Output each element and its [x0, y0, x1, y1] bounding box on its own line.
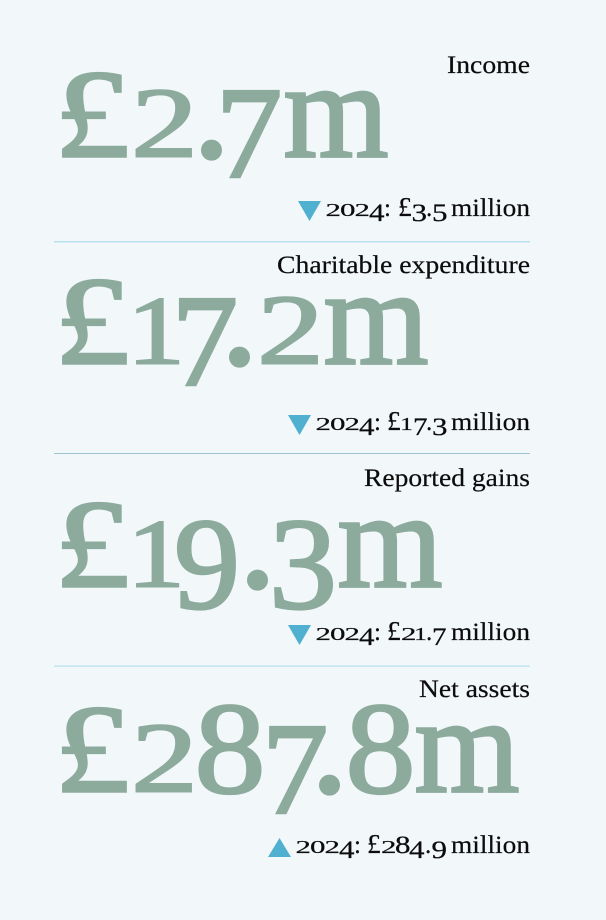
comparison: 2024 reported gains: 7	[432, 623, 446, 651]
big number: £2.7m: 7	[216, 60, 282, 206]
big number: £19.3m: .	[238, 452, 276, 620]
big number: £19.3m: 1	[127, 500, 185, 608]
comparison: 2024 income: .	[426, 195, 432, 222]
icon: down triangle	[298, 201, 321, 221]
big number: £287.8m: 8	[346, 677, 415, 821]
big number: £19.3m: £	[54, 475, 130, 615]
comparison: 2024 reported gains: 0	[330, 625, 345, 644]
comparison: 2024 net assets: 2	[296, 838, 311, 857]
comparison: 2024 net assets: million	[451, 832, 531, 859]
comparison: 2024 income: 5	[432, 200, 447, 227]
big number: £19.3m: 3	[269, 491, 337, 636]
comparison: 2024 reported gains: 2	[401, 625, 416, 644]
comparison: 2024 income: million	[451, 195, 531, 222]
heading: reported gains: Reported gains	[364, 465, 530, 492]
comparison: 2024 net assets: 8	[395, 832, 410, 859]
comparison: 2024 net assets	[296, 829, 531, 864]
comparison: 2024 income: 2	[354, 201, 370, 220]
big number: £2.7m: m	[284, 36, 389, 187]
comparison: 2024 income: 4	[369, 200, 384, 227]
comparison: 2024 reported gains: :	[374, 619, 381, 646]
big number: £2.7m: .	[192, 22, 230, 190]
comparison: 2024 charitable expenditure	[316, 406, 531, 441]
comparison: 2024 income: :	[384, 195, 391, 222]
comparison: 2024 income: 0	[340, 201, 355, 220]
big number: £287.8m: .	[310, 657, 348, 825]
comparison: 2024 charitable expenditure: :	[374, 409, 381, 436]
comparison: 2024 reported gains: million	[451, 619, 531, 646]
comparison: 2024 income: £	[398, 192, 412, 222]
comparison: 2024 income: 2	[326, 201, 341, 220]
big number: £287.8m: m	[414, 671, 520, 822]
comparison: 2024 net assets: £	[367, 829, 381, 859]
comparison: 2024 reported gains: 2	[316, 625, 331, 644]
big number: £287.8m: 8	[194, 676, 266, 821]
big number: £19.3m	[54, 452, 443, 637]
comparison: 2024 net assets: 0	[310, 838, 325, 857]
panel: reported gains	[54, 452, 531, 651]
big number: £2.7m	[54, 22, 389, 206]
comparison: 2024 net assets: 4	[409, 837, 424, 864]
comparison: 2024 reported gains: £	[387, 616, 401, 646]
big number: £19.3m: 9	[174, 492, 240, 637]
big number: £17.2m: 7	[172, 268, 238, 414]
comparison: 2024 charitable expenditure: 2	[344, 415, 360, 434]
icon: down triangle	[288, 415, 311, 435]
heading: charitable expenditure: Charitable expenditure	[277, 252, 530, 279]
heading: net assets: Net assets	[419, 676, 530, 703]
comparison: 2024 charitable expenditure: 4	[359, 414, 374, 441]
comparison: 2024 reported gains	[316, 616, 531, 651]
heading: income: Income	[447, 52, 530, 79]
comparison: 2024 charitable expenditure: £	[387, 406, 401, 436]
comparison: 2024 net assets: 2	[381, 838, 396, 857]
comparison: 2024 income	[326, 192, 531, 227]
big number: £17.2m: 1	[127, 277, 185, 385]
panel: income	[54, 22, 531, 227]
big number: £17.2m: .	[220, 229, 258, 397]
big number: £287.8m: £	[54, 680, 130, 820]
comparison: 2024 charitable expenditure: 2	[316, 415, 331, 434]
comparison: 2024 net assets: 9	[432, 837, 447, 864]
big number: £17.2m	[54, 229, 429, 414]
big number: £2.7m: 2	[131, 68, 198, 178]
big number: £19.3m: m	[338, 466, 443, 617]
comparison: 2024 charitable expenditure: million	[451, 409, 531, 436]
big number: £287.8m	[54, 657, 520, 842]
comparison: 2024 reported gains: 2	[344, 625, 360, 644]
comparison: 2024 net assets: 2	[324, 838, 340, 857]
comparison: 2024 charitable expenditure: 7	[413, 413, 427, 441]
big number: £17.2m: £	[54, 252, 130, 392]
icon: down triangle	[288, 625, 311, 645]
comparison: 2024 reported gains: .	[426, 619, 432, 646]
big number: £287.8m: 7	[262, 696, 328, 842]
comparison: 2024 charitable expenditure: .	[426, 409, 432, 436]
comparison: 2024 net assets: .	[425, 832, 431, 859]
panel: net assets	[54, 657, 531, 864]
comparison: 2024 reported gains: 1	[414, 624, 427, 644]
comparison: 2024 charitable expenditure: 0	[330, 415, 345, 434]
big number: £2.7m: £	[54, 45, 130, 185]
comparison: 2024 charitable expenditure: 3	[432, 414, 447, 441]
big number: £17.2m: 2	[257, 275, 324, 385]
comparison: 2024 reported gains: 4	[359, 624, 374, 651]
big number: £17.2m: m	[324, 243, 429, 394]
comparison: 2024 net assets: 4	[339, 837, 354, 864]
comparison: 2024 charitable expenditure: 1	[400, 414, 413, 434]
panel: charitable expenditure	[54, 229, 531, 441]
comparison: 2024 net assets: :	[354, 832, 361, 859]
big number: £287.8m: 2	[131, 703, 198, 813]
comparison: 2024 income: 3	[412, 200, 427, 227]
icon: up triangle	[268, 838, 291, 857]
